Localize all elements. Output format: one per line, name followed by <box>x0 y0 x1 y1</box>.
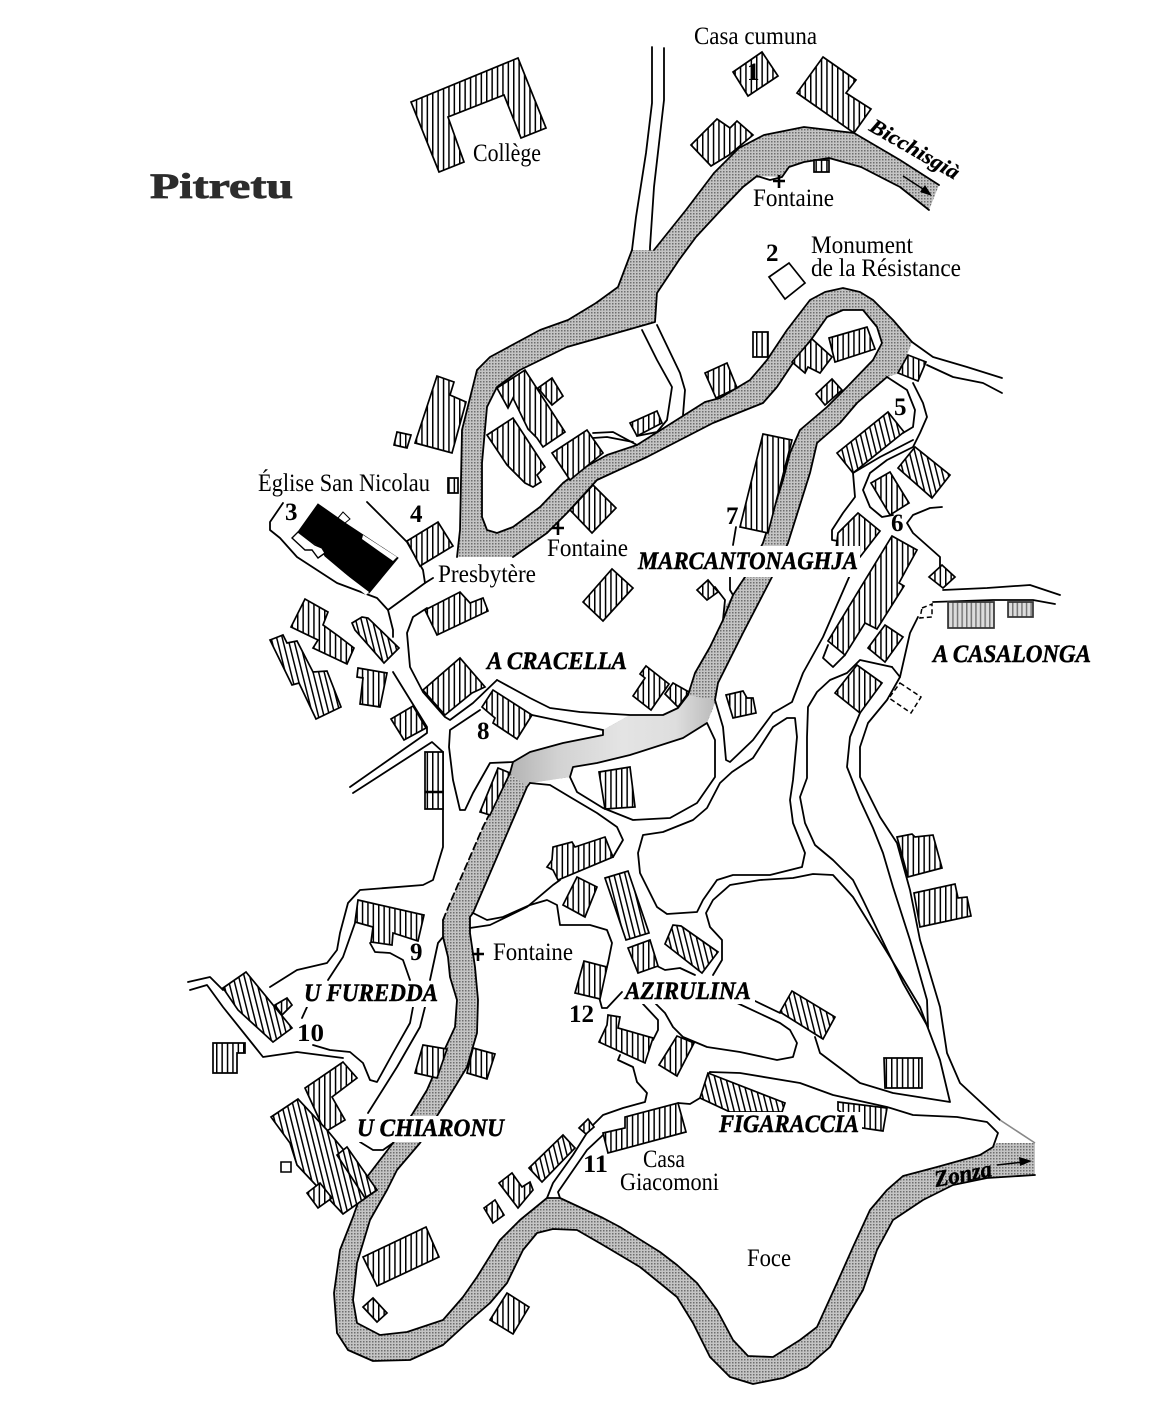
number 6: 6 <box>891 510 904 537</box>
label: Monument de la Résistance: Monument <box>811 232 913 259</box>
number 7: 7 <box>726 503 738 530</box>
fountain marker, south <box>472 948 484 961</box>
dashed road edge <box>443 813 490 920</box>
building: Collège <box>411 58 546 172</box>
label: Presbytère: Presbytère <box>438 561 536 588</box>
line across the tall building <box>425 791 443 793</box>
road outlines of the lower grey road <box>334 543 1035 1384</box>
church: Église San Nicolau, black <box>292 504 398 595</box>
number 5: 5 <box>894 394 906 421</box>
number 10: 10 <box>297 1020 324 1047</box>
buildings: Figaraccia and Casa Giacomoni <box>363 1073 887 1334</box>
number 9: 9 <box>410 939 422 966</box>
monument de la Résistance <box>769 263 805 299</box>
place name: U Chiaronu: U CHIARONU <box>357 1115 506 1142</box>
arrow: Zonza flow <box>997 1157 1032 1166</box>
number 11: 11 <box>583 1151 608 1178</box>
road network: grey main road, lower section to Zonza <box>334 543 1035 1384</box>
number 4: 4 <box>410 501 423 528</box>
fountain marker, centre <box>552 522 564 535</box>
buildings: inside the upper loop <box>394 370 718 621</box>
title: Pitretu <box>150 166 293 206</box>
label: Casa Giacomoni: Casa <box>643 1146 685 1173</box>
buildings: north, around the upper road <box>691 52 871 172</box>
label: Casa Giacomoni <box>620 1146 719 1196</box>
white road outlines <box>188 47 1060 1198</box>
place name: Figaraccia: FIGARACCIA <box>718 1111 859 1138</box>
buildings: east of the junction <box>599 625 903 809</box>
label: Fontaine, south: Fontaine <box>493 939 573 966</box>
place name: Azirulina: AZIRULINA <box>623 978 751 1005</box>
arrow: Bicchisgià flow <box>903 176 932 196</box>
stream name: Zonza: Zonza <box>931 1156 994 1192</box>
number 3: 3 <box>285 499 298 526</box>
fountain marker, north <box>773 175 785 188</box>
road network: grey main road, upper section <box>457 127 939 557</box>
buildings: A Casalonga <box>948 602 1033 628</box>
place name: Marcantonaghja: MARCANTONAGHJA <box>637 548 858 575</box>
label: Casa Giacomoni: Giacomoni <box>620 1169 719 1196</box>
place name: A Casalonga: A CASALONGA <box>931 641 1091 668</box>
number 1: 1 <box>747 59 760 86</box>
stream name: Bicchisgià: Bicchisgià <box>865 113 964 184</box>
label: Collège: Collège <box>473 140 541 167</box>
label: Monument de la Résistance: de la Résistance <box>811 255 961 282</box>
number 2: 2 <box>766 240 778 267</box>
demolished or projected buildings, dashed <box>889 604 932 713</box>
number 12: 12 <box>569 1001 594 1028</box>
label: Église San Nicolau: Église San Nicolau <box>258 469 430 497</box>
label: Foce: Foce <box>747 1245 791 1272</box>
junction fade <box>510 695 715 787</box>
buildings: along the hairpin and Marcantonaghja <box>705 327 955 655</box>
label: Monument de la Résistance <box>811 232 961 282</box>
label: Fontaine, north: Fontaine <box>753 185 834 212</box>
label: Fontaine, centre: Fontaine <box>547 535 628 562</box>
buildings: centre <box>547 834 971 1088</box>
buildings: A Cracella <box>270 592 532 815</box>
place name: A Cracella: A CRACELLA <box>485 648 627 675</box>
label: Casa cumuna: Casa cumuna <box>694 23 817 50</box>
buildings: U Furedda and U Chiaronu <box>213 900 495 1214</box>
number 8: 8 <box>477 718 490 745</box>
place name: U Furedda: U FUREDDA <box>304 980 438 1007</box>
gray diagonal edge to the Zonza junction <box>1000 1120 1035 1143</box>
